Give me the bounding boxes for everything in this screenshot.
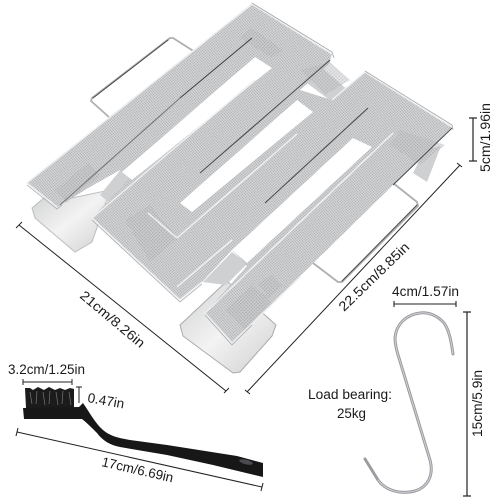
dimension: hook height: 15cm/5.9in xyxy=(470,370,485,437)
dimension: brush length xyxy=(16,428,263,491)
dimension: bristle height: 0.47in xyxy=(86,390,126,411)
slots between baskets xyxy=(122,57,372,263)
load bearing label: Load bearing: xyxy=(308,387,392,402)
dimension: length 22.5cm: 22.5cm/8.85in xyxy=(336,239,412,314)
tray: bottom xyxy=(180,281,276,373)
load bearing label xyxy=(308,387,392,421)
brush head and handle xyxy=(23,403,263,477)
dimension: hook width: 4cm/1.57in xyxy=(392,284,459,299)
basket frame edges: dark xyxy=(60,38,452,205)
basket frame edges: outline xyxy=(27,3,453,345)
dimension: height 5cm: 5cm/1.96in xyxy=(478,103,493,172)
tray: cross strips xyxy=(100,66,441,285)
dimension: length 22.5cm xyxy=(245,163,462,394)
brush bristles xyxy=(25,387,74,408)
handle: left wire xyxy=(91,38,195,118)
dimension: bristle height xyxy=(76,387,126,411)
cleaning brush xyxy=(23,387,263,477)
dimension: hook width xyxy=(392,284,459,307)
dimension: brush head width xyxy=(8,362,85,385)
dimension: width 21cm xyxy=(16,222,229,393)
handle: right wire xyxy=(313,183,418,282)
tray: lower left xyxy=(32,190,110,252)
dimension: brush head width: 3.2cm/1.25in xyxy=(8,362,85,377)
dimension: height 5cm xyxy=(469,103,493,172)
S hook xyxy=(365,313,453,492)
basket frame edges: light xyxy=(27,4,452,343)
dimension: width 21cm: 21cm/8.26in xyxy=(77,288,148,351)
brush handle hole xyxy=(239,458,253,466)
basket shaded mesh patches xyxy=(55,28,445,330)
basket mesh body xyxy=(27,4,452,343)
load bearing label: 25kg xyxy=(337,406,366,421)
smoker basket product photo xyxy=(27,3,453,373)
dimension: brush length: 17cm/6.69in xyxy=(100,454,175,485)
